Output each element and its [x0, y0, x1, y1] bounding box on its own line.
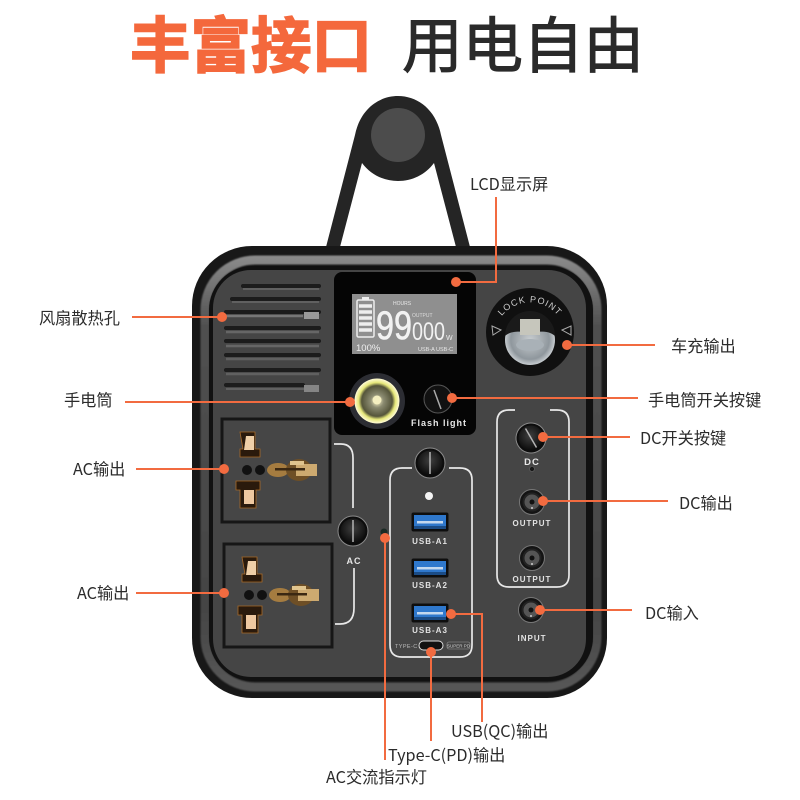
flashlight switch: Flash light: [411, 418, 467, 428]
DC input port: INPUT: [518, 634, 546, 643]
LCD screen: [352, 294, 457, 354]
callout: fan vent: 风扇散热孔: [39, 305, 120, 329]
USB panel: USB-A3: [412, 626, 448, 635]
callout: DC output: [538, 490, 733, 514]
DC input port: [518, 598, 546, 643]
car charger port: [486, 288, 574, 376]
USB panel: [390, 448, 472, 657]
DC panel: DC: [524, 457, 540, 468]
callout: flashlight: [64, 387, 355, 411]
callout: AC indicator: [326, 533, 427, 788]
AC indicator light: [380, 528, 388, 536]
callout: USB QC: USB(QC)输出: [451, 718, 548, 742]
car charger port: LOCK POINT: [498, 296, 562, 316]
USB panel: TYPE-C: [395, 644, 418, 650]
callout: AC output 1: [73, 456, 229, 480]
carry handle: [326, 96, 470, 247]
callout: DC switch: DC开关按键: [640, 425, 726, 449]
callout: car charger: [562, 333, 736, 357]
LCD screen: HOURS: [393, 301, 412, 307]
DC panel: [497, 410, 569, 587]
LCD screen: USB-A USB-C: [418, 347, 453, 353]
callout: LCD: [451, 171, 548, 287]
callout: Type-C: [388, 647, 505, 766]
flashlight switch: [411, 385, 467, 428]
callout: DC input: DC输入: [645, 600, 699, 624]
callout: DC input: [535, 600, 699, 624]
LCD screen: W: [446, 335, 453, 342]
black control panel: [334, 272, 476, 435]
callout: LCD: LCD显示屏: [470, 171, 548, 195]
USB panel: USB-A2: [412, 581, 448, 590]
callout: AC indicator: AC交流指示灯: [326, 764, 427, 788]
AC socket 1: [222, 419, 330, 522]
flashlight: [349, 373, 405, 429]
LCD screen: 000: [412, 318, 445, 346]
power station body: [192, 246, 607, 698]
LCD screen: 100%: [356, 343, 381, 354]
title: [130, 0, 644, 85]
title: 丰富接口: [130, 0, 372, 85]
callout: Type-C: Type-C(PD)输出: [388, 742, 505, 766]
callout: car charger: 车充输出: [671, 333, 736, 357]
callout: AC output 2: AC输出: [77, 580, 129, 604]
callout: fan vent: [39, 305, 227, 329]
callout: flashlight: 手电筒: [64, 387, 113, 411]
callout: DC output: DC输出: [679, 490, 733, 514]
LCD screen: 99: [376, 304, 412, 348]
callout: DC switch: [538, 425, 726, 449]
callout: flashlight switch: [447, 387, 761, 411]
callout: USB QC: [446, 609, 548, 742]
LCD screen: OUTPUT: [412, 313, 433, 319]
AC socket 2: [224, 544, 332, 647]
DC panel: OUTPUT: [513, 519, 551, 528]
callout: flashlight switch: 手电筒开关按键: [648, 387, 761, 411]
AC bracket and switch: AC: [346, 556, 362, 566]
USB panel: SUPER PD: [447, 644, 471, 648]
DC panel: OUTPUT: [513, 575, 551, 584]
title: 用电自由: [402, 0, 644, 85]
AC bracket and switch: [334, 444, 368, 624]
USB panel: USB-A1: [412, 537, 448, 546]
callout: AC output 2: [77, 580, 229, 604]
fan vent slots: [226, 286, 319, 392]
callout: AC output 1: AC输出: [73, 456, 125, 480]
